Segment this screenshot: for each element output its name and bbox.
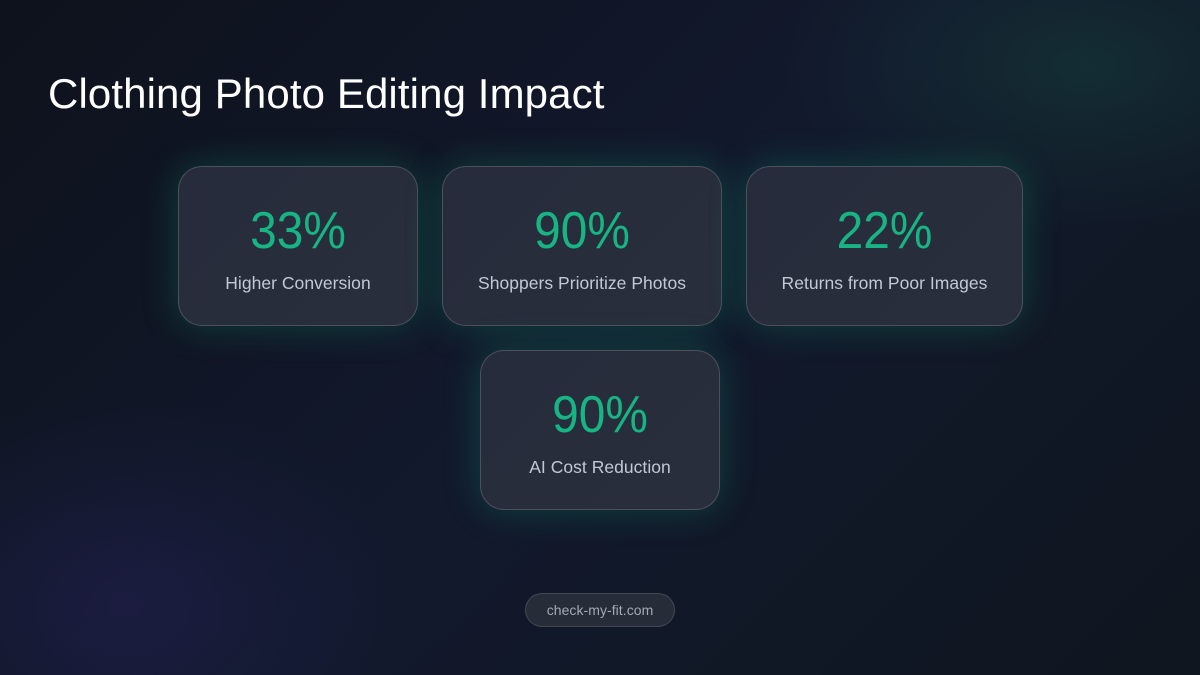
footer badge	[525, 593, 675, 627]
panel: AI cost reduction	[480, 350, 720, 510]
panel: higher conversion	[178, 166, 418, 326]
label: returns from poor images: Returns from Poor Images	[782, 273, 987, 293]
footer badge: check-my-fit.com	[547, 602, 653, 618]
stat: 22%: 22%	[837, 202, 932, 260]
stat: 90%: 90%	[552, 386, 648, 444]
stat: 33%: 33%	[250, 202, 346, 260]
label: shoppers prioritize photos: Shoppers Prioritize Photos	[478, 273, 686, 293]
panel: shoppers prioritize photos	[442, 166, 722, 326]
stat: 90%: 90%	[534, 202, 630, 260]
label: higher conversion: Higher Conversion	[225, 273, 371, 293]
panel: returns from poor images	[746, 166, 1023, 326]
label: AI cost reduction: AI Cost Reduction	[529, 457, 671, 477]
title: Clothing Photo Editing Impact	[48, 70, 605, 117]
